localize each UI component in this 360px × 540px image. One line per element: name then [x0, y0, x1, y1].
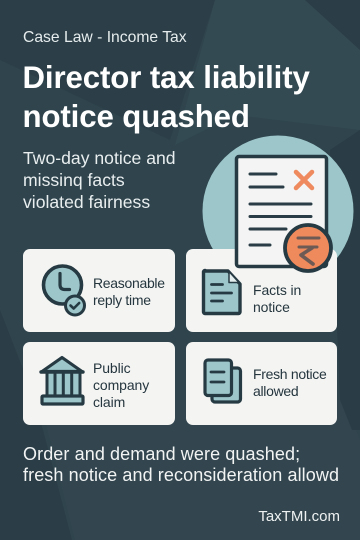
subtitle: Two-day notice and: [23, 148, 176, 168]
label: Facts in: [253, 282, 301, 298]
icon: document: [202, 268, 242, 316]
title: notice quashed: [22, 99, 250, 134]
teal circle behind document: [202, 136, 354, 258]
source: TaxTMI.com: TaxTMI.com: [258, 508, 340, 524]
conclusion text: Order and demand were quashed;: [23, 444, 300, 464]
label: [93, 360, 150, 410]
label: Fresh notice: [253, 366, 326, 382]
icon: clock with check: [42, 264, 86, 316]
icon: bank building: [39, 356, 85, 406]
label: [253, 282, 301, 314]
label: allowed: [253, 383, 298, 399]
document illustration with rupee badge: [234, 154, 333, 273]
label: [253, 366, 326, 399]
label: notice: [253, 298, 290, 314]
label: Public: [93, 360, 131, 376]
icon: orange cross: [296, 172, 312, 188]
subtitle: violated fairness: [23, 192, 150, 212]
icon: rupee badge: [285, 225, 331, 271]
eyebrow: category: Case Law - Income Tax: [23, 29, 187, 46]
title: Director tax liability: [22, 60, 310, 95]
subtitle: missinq facts: [23, 170, 125, 190]
icon: notice document: [236, 156, 326, 266]
label: reply time: [93, 292, 151, 308]
icon: two documents: [203, 358, 242, 404]
label: Reasonable: [93, 275, 165, 291]
title: [22, 60, 310, 134]
card: facts in notice: [186, 248, 337, 332]
conclusion text: [23, 444, 339, 485]
label: company: [93, 376, 149, 392]
label: claim: [93, 394, 125, 410]
card: public company claim: [23, 342, 175, 425]
card: reasonable reply time: [23, 248, 175, 332]
card: fresh notice allowed: [186, 342, 337, 425]
subtitle: [23, 148, 176, 212]
conclusion text: fresh notice and reconsideration allowd: [23, 465, 339, 485]
label: [93, 275, 165, 308]
